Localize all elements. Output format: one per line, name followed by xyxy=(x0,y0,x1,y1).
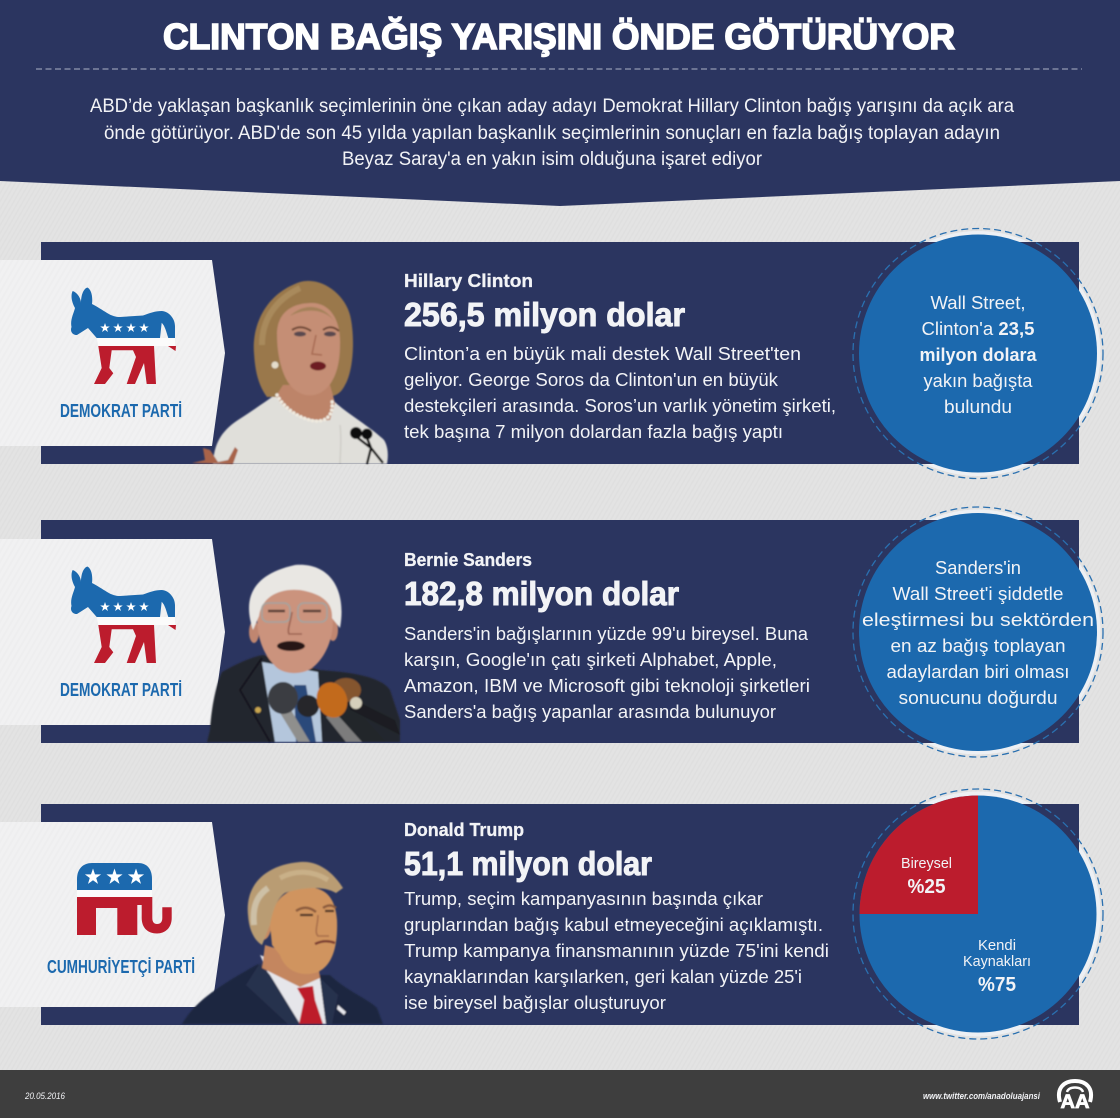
candidate text: Trump: ise bireysel bağışlar oluşturuyor xyxy=(404,993,666,1013)
candidate text: Trump: Trump kampanya finansmanının yüzde 75'ini kendi xyxy=(404,941,829,961)
party label: CUMHURİYETÇİ PARTİ xyxy=(47,957,195,977)
candidate text: Trump: gruplarından bağış kabul etmeyeceğini açıklamıştı. xyxy=(404,915,823,935)
candidate text: Sanders: Bernie Sanders xyxy=(404,550,532,570)
icon: donkey xyxy=(71,288,176,384)
candidate text: Trump: 51,1 milyon dolar xyxy=(404,845,652,882)
callout circle: Sanders Wall Street: adaylardan biri olması xyxy=(886,662,1070,682)
candidate text: Sanders xyxy=(404,550,810,722)
callout circle: Sanders Wall Street: en az bağış toplayan xyxy=(890,636,1066,656)
intro text: ABD’de yaklaşan başkanlık seçimlerinin öne çıkan aday adayı Demokrat Hillary Clinton bağış yarışını da açık ara xyxy=(90,96,1014,117)
party label: DEMOKRAT PARTİ xyxy=(60,401,182,421)
candidate text: Clinton: Clinton’a en büyük mali destek Wall Street'ten xyxy=(404,344,801,364)
candidate text: Sanders: Sanders'a bağış yapanlar arasında bulunuyor xyxy=(404,702,776,722)
icon: AA logo xyxy=(1059,1081,1091,1113)
pie chart: funding sources: %25 xyxy=(908,876,946,898)
intro text: Beyaz Saray'a en yakın isim olduğuna işaret ediyor xyxy=(342,149,763,170)
callout circle: Wall Street: Clinton'a 23,5 xyxy=(922,319,1034,339)
callout circle: Wall Street: bulundu xyxy=(944,397,1012,417)
pie chart: funding sources: Kendi xyxy=(978,937,1016,954)
candidate text: Sanders: Sanders'in bağışlarının yüzde 99'u bireysel. Buna xyxy=(404,624,809,644)
candidate text: Trump: Trump, seçim kampanyasının başında çıkar xyxy=(404,889,763,909)
callout circle: Sanders Wall Street: Sanders'in xyxy=(935,558,1021,578)
photo: Bernie Sanders xyxy=(207,565,400,742)
date: 20.05.2016 xyxy=(24,1091,65,1101)
candidate text: Trump xyxy=(404,820,829,1013)
callout circle: Wall Street: milyon dolara xyxy=(920,345,1037,365)
icon: elephant xyxy=(77,863,172,935)
candidate text: Clinton: Hillary Clinton xyxy=(404,271,533,291)
candidate text: Clinton: geliyor. George Soros da Clinton'un en büyük xyxy=(404,370,779,390)
callout circle: Sanders Wall Street: sonucunu doğurdu xyxy=(898,688,1058,708)
panel: Donald Trump xyxy=(0,789,1103,1039)
intro text xyxy=(90,96,1014,170)
candidate text: Clinton: tek başına 7 milyon dolardan fazla bağış yaptı xyxy=(404,422,783,442)
source url: www.twitter.com/anadoluajansi xyxy=(923,1091,1040,1102)
candidate text: Sanders: Amazon, IBM ve Microsoft gibi teknoloji şirketleri xyxy=(404,676,810,696)
party tag: Demokrat xyxy=(0,260,225,446)
candidate text: Sanders: karşın, Google'ın çatı şirketi Alphabet, Apple, xyxy=(404,650,777,670)
panel: Bernie Sanders xyxy=(0,507,1103,757)
callout circle: Sanders Wall Street: Wall Street'i şiddetle xyxy=(892,584,1064,604)
pie chart: funding sources: Bireysel xyxy=(901,855,952,872)
title: CLINTON BAĞIŞ YARIŞINI ÖNDE GÖTÜRÜYOR xyxy=(163,16,955,57)
footer bar xyxy=(0,1070,1120,1118)
candidate text: Trump: Donald Trump xyxy=(404,820,524,840)
header band xyxy=(0,0,1120,206)
callout circle: Sanders Wall Street xyxy=(853,507,1103,757)
party label: DEMOKRAT PARTİ xyxy=(60,680,182,700)
callout circle: Wall Street xyxy=(853,228,1103,478)
party tag: Cumhuriyetçi xyxy=(0,822,225,1007)
callout circle: Sanders Wall Street: eleştirmesi bu sektörden xyxy=(862,609,1094,630)
callout circle: Wall Street: yakın bağışta xyxy=(924,371,1033,391)
pie chart: funding sources xyxy=(853,789,1103,1039)
pie chart: funding sources: %75 xyxy=(978,974,1016,996)
icon: AA logo: AA xyxy=(1060,1092,1090,1113)
intro text: önde götürüyor. ABD'de son 45 yılda yapılan başkanlık seçimlerinin sonuçları en fazla bağış toplayan adayın xyxy=(104,123,1000,144)
photo: Donald Trump xyxy=(182,862,383,1024)
candidate text: Trump: kaynaklarından karşılarken, geri kalan yüzde 25'i xyxy=(404,967,802,987)
candidate text: Sanders: 182,8 milyon dolar xyxy=(404,575,679,612)
photo: Hillary Clinton xyxy=(192,281,388,464)
candidate text: Clinton: destekçileri arasında. Soros’un varlık yönetim şirketi, xyxy=(404,396,836,416)
candidate text: Clinton xyxy=(404,271,836,442)
candidate text: Clinton: 256,5 milyon dolar xyxy=(404,296,685,333)
icon: donkey xyxy=(71,566,176,663)
pie chart: funding sources: Kaynakları xyxy=(963,953,1031,970)
party tag: Demokrat xyxy=(0,539,225,725)
panel: Hillary Clinton xyxy=(0,228,1103,478)
callout circle: Wall Street: Wall Street, xyxy=(930,293,1026,313)
